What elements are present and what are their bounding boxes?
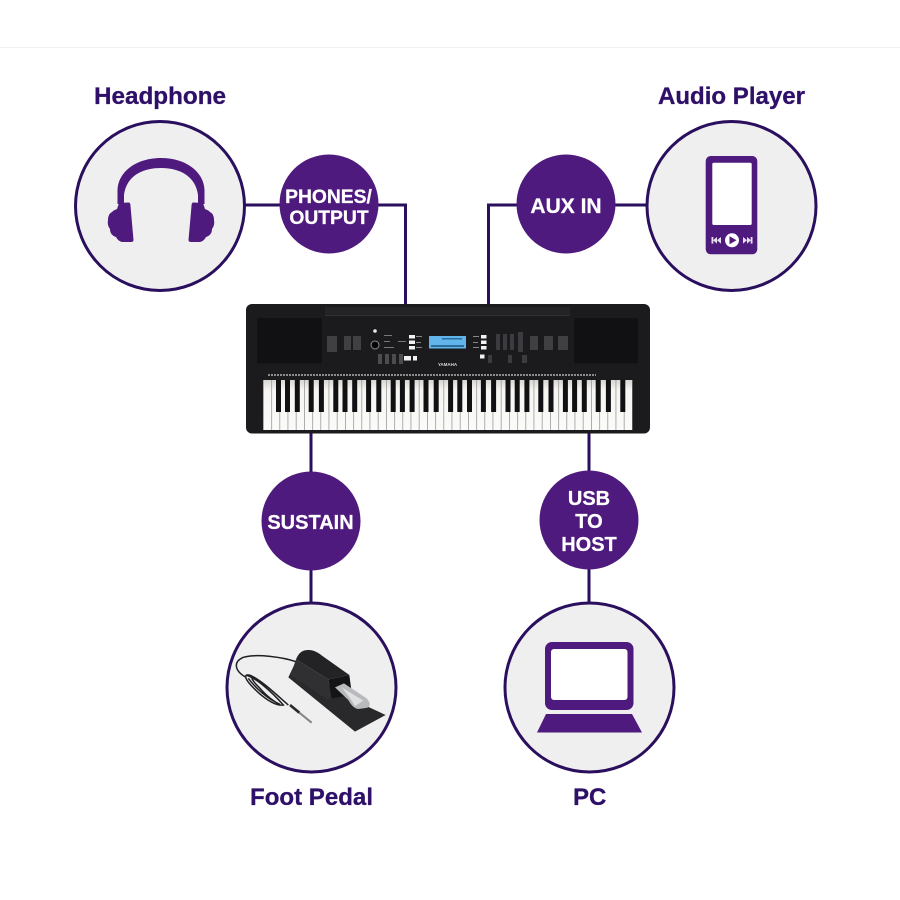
left speaker: [257, 318, 322, 364]
connector: sustain to pedal: [310, 433, 312, 602]
right speaker: [574, 318, 638, 364]
heading: PC: PC: [573, 784, 606, 811]
icon: headphones: [108, 158, 214, 242]
heading: Foot Pedal: Foot Pedal: [250, 784, 373, 811]
panel: audio player: [647, 122, 816, 290]
connector: phones to keyboard: [245, 205, 406, 304]
badge: aux in: [516, 154, 616, 254]
icon: sustain pedal: [236, 650, 386, 732]
lcd display: [429, 336, 466, 348]
control panel: [327, 329, 568, 364]
badge: usb to host: TO: [575, 511, 603, 533]
panel: foot pedal: [227, 603, 396, 772]
heading: Audio Player: Audio Player: [658, 83, 805, 110]
keyboard: [246, 304, 650, 434]
badge: sustain: SUSTAIN: [267, 512, 354, 534]
badge: phones/output: PHONES/: [285, 187, 373, 208]
icon: laptop: [537, 642, 642, 732]
logo: YAMAHA: [438, 362, 458, 367]
badge: usb to host: HOST: [561, 534, 617, 556]
connector: aux in to keyboard: [488, 205, 646, 304]
badge: phones/output: [280, 154, 378, 254]
panel: pc: [505, 603, 674, 772]
badge: usb to host: USB: [568, 488, 610, 510]
piano keys: [263, 380, 632, 430]
key marker row: [268, 374, 596, 376]
heading: Headphone: Headphone: [94, 83, 226, 110]
connector: usb to pc: [588, 433, 590, 602]
badge: usb to host: [540, 470, 638, 570]
panel: headphone: [76, 122, 244, 290]
badge: phones/output: OUTPUT: [289, 208, 369, 229]
badge: sustain: [262, 472, 360, 570]
badge: aux in: AUX IN: [530, 195, 602, 218]
icon: media player: [706, 156, 757, 254]
